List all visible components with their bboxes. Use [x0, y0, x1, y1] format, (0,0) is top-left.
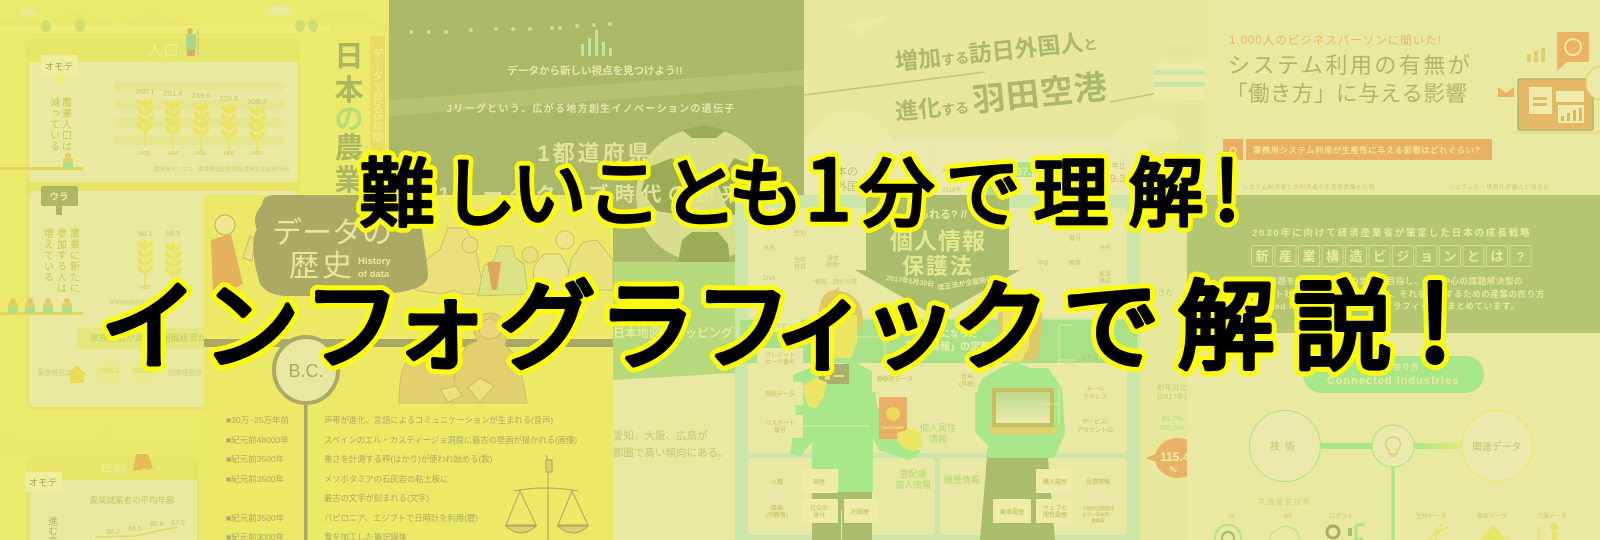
illustration: Caesar	[211, 215, 255, 298]
timeline years: ■紀元前3500年	[226, 454, 285, 464]
icon: house	[67, 365, 87, 383]
illustration: apes	[399, 313, 527, 403]
timeline years: ■紀元前48000年	[226, 435, 289, 445]
icon: IoT cloud	[1270, 526, 1299, 540]
illustration: cloud heading: of data	[358, 269, 390, 280]
title: vision: ョ	[1420, 249, 1433, 264]
title: Japan agriculture: 業	[334, 164, 364, 197]
small labels top: 特徴*	[826, 261, 841, 269]
icon: warning triangle	[1480, 525, 1506, 540]
stadium lights	[409, 22, 612, 34]
small labels top: 性別	[794, 229, 806, 237]
description: 一人一人の課題を解決する社会の実現を目指し、人間中心の課題解決型の	[1223, 276, 1523, 286]
bar chart: farming population: H25	[196, 151, 206, 157]
right column stats: (2017年)	[1157, 391, 1187, 401]
tiles upper: 静脈紋データ	[877, 375, 913, 383]
circle: related data	[1462, 410, 1532, 482]
source note: 農林業センサス、農業構造動態調査(農林水産省統計部)	[154, 165, 290, 173]
banner: personal information protection law	[855, 195, 1020, 317]
banner: personal information protection law: 2017年5月30日	[886, 273, 935, 289]
card: visitors bars: 2015年	[942, 166, 961, 174]
bar chart: farming population: H26	[224, 151, 234, 157]
icon: envelope	[1498, 87, 1514, 97]
description: 超スマート社会(Society 5.0 社会)と、それを推進するための産業の在り方	[1239, 289, 1545, 299]
illustration: cloud heading: History	[358, 256, 391, 267]
main title: line 2: インフォグラフィックで解説 !	[100, 240, 1452, 392]
line chart: age: 66.2	[106, 529, 120, 536]
timeline events	[324, 415, 577, 540]
hills header	[0, 10, 390, 35]
question tag: Q	[1229, 146, 1237, 157]
bar chart: farming population: 239.0	[192, 91, 210, 100]
question tag	[1223, 139, 1243, 160]
title: Japan agriculture	[334, 36, 385, 197]
title underline	[804, 72, 1158, 102]
source note 2: 新規就農者調査の調査結果	[110, 299, 170, 306]
small labels top: *家紋、顔だち等	[813, 278, 857, 286]
icon: control tower	[1154, 44, 1206, 160]
bar chart: farming population	[115, 82, 284, 157]
tiles upper: 音声	[961, 375, 973, 381]
bar chart: new farmers: 58.1	[138, 229, 152, 238]
title: vision: ?	[1517, 249, 1525, 264]
tiles lower: 身分	[813, 511, 825, 519]
right column stats: 前年対比	[1157, 382, 1187, 392]
heading: システム利用の有無が	[1228, 53, 1472, 78]
label: omote: オモテ	[29, 478, 57, 489]
main title: line 1: 難しいことも1分で理解!	[359, 124, 1240, 245]
bar chart: farming population: 251.4	[164, 89, 182, 98]
stat: 1344.3	[130, 360, 156, 386]
icon: AI gear	[1215, 525, 1241, 540]
tiles upper: アドレス	[1083, 394, 1107, 401]
card: visitors bars: 年比	[1112, 161, 1126, 170]
small labels top: 番号	[1069, 235, 1081, 242]
pill: connected industries: Connected Industries	[1327, 375, 1459, 387]
line chart: age: 66.8	[150, 521, 164, 528]
tiles lower: より一部抜粋、	[1082, 511, 1114, 518]
card: visitors bars: 2016年	[942, 186, 961, 194]
bar chart: new farmers	[137, 229, 181, 291]
tiles lower: 位置情報	[1086, 478, 1110, 486]
connectors	[1320, 443, 1464, 540]
title: vision: 産	[1279, 249, 1292, 264]
definition band: 明確になった	[923, 328, 977, 339]
small labels top: DNA	[763, 276, 775, 282]
timeline rail	[204, 339, 613, 347]
title: Japan agriculture: 農	[334, 132, 364, 165]
right column stats	[1142, 288, 1201, 478]
lower tiles card right	[940, 458, 1127, 535]
title: Haneda: 進化する羽田空港	[893, 68, 1110, 127]
pill: connected industries: 産業の在り方	[1367, 362, 1419, 372]
small labels top	[763, 229, 1111, 286]
illustration: cloud heading: 歴史	[289, 250, 355, 283]
panel: data history timeline	[204, 195, 613, 540]
tiles lower: ウェブの	[1043, 506, 1067, 512]
banner: family vs organisation	[77, 328, 207, 349]
panel: J-League soccer infographic	[389, 0, 805, 540]
tiles lower: (宗教等)	[766, 511, 788, 519]
tagline: Jリーグという、広がる地方創生イノベーションの遺伝子	[446, 102, 736, 115]
tiles lower: 人種	[771, 478, 783, 486]
icon: robot arm	[1327, 523, 1363, 539]
title: Japan agriculture: 日	[334, 41, 364, 73]
label: ura	[41, 186, 78, 215]
lower section: map	[613, 262, 735, 540]
icon: gear	[1586, 66, 1600, 100]
card: visitors bars: 本の	[836, 164, 858, 178]
panel: personal information protection law	[735, 195, 1140, 540]
card: visitors bars	[804, 140, 1147, 230]
heading: sensitive info: 個人情報	[895, 479, 931, 490]
kicker: 1,000人のビジネスパーソンに聞いた!	[1229, 34, 1442, 47]
timeline events: メソポタミアの石灰岩の粘土板に	[324, 474, 448, 484]
title: Japan agriculture: データで見る5年間	[371, 47, 384, 143]
small labels top: 年収	[1037, 259, 1049, 267]
tiles upper: (声紋)	[959, 380, 975, 388]
definition band	[740, 320, 1137, 363]
main title: line 2: インフォグラフィックで解説 !	[100, 240, 1452, 392]
tiles upper: クレジット	[765, 353, 795, 359]
heading: sensitive info: 要配慮	[899, 469, 927, 479]
leader lines	[802, 325, 1075, 426]
small labels top: 住所	[1099, 244, 1111, 252]
icon: chat magnifier	[1557, 32, 1589, 71]
heading line 2: 「働き方」に与える影響	[1226, 82, 1467, 106]
stadium band	[389, 70, 805, 116]
heading: attribute info: 個人属性	[920, 423, 956, 433]
icon: light bulb	[1372, 425, 1414, 467]
heading: club era: 1リーグクラブ時代の到来	[439, 182, 747, 206]
title: vision: ジ	[1396, 249, 1410, 264]
lower tiles card left	[748, 458, 935, 535]
bar chart: new farmers: H23	[140, 285, 150, 291]
banner: family vs organisation: 家族経営が減り、組織経営が	[90, 332, 207, 343]
bar chart: farming population: H27	[252, 151, 262, 157]
icon: soccer ball	[636, 125, 770, 262]
label: omote	[25, 472, 62, 492]
small labels top: 職業	[1069, 259, 1081, 267]
lower section: map: 日本地図にマッピング	[613, 325, 733, 340]
timeline events: 重さを計測する秤(はかり)が使われ始める(数)	[324, 454, 493, 464]
figure: woman	[975, 292, 1065, 540]
circle: related data: 関連データ	[1472, 441, 1522, 453]
tiles lower	[766, 469, 1114, 524]
title: vision: 業	[1302, 249, 1316, 264]
panel: system use survey	[1205, 0, 1600, 195]
timeline events: 最古の文字が刻まれる(文字)	[324, 493, 429, 503]
badge: B.C.	[274, 337, 338, 403]
card: population	[26, 28, 300, 410]
banner: personal information protection law: 守られる? //	[907, 207, 967, 221]
heading: one prefecture: 1都道府県	[537, 141, 653, 166]
tiles lower: 購入履歴	[1043, 478, 1067, 486]
text: organisation management: 組織経営体	[168, 368, 202, 377]
illustration: cloud heading	[253, 195, 428, 304]
tiles lower: 犯罪歴	[851, 508, 869, 516]
icon: passport	[879, 397, 907, 439]
question bar: 業務用システム利用が生産性に与える影響はどれぐらい?	[1253, 145, 1480, 155]
banner: personal information protection law: 個人情報	[890, 228, 986, 254]
bar chart: farming population: H23	[140, 151, 150, 157]
figure: man	[790, 286, 922, 540]
small labels top: 氏名	[763, 244, 775, 252]
icon: stump	[133, 454, 153, 470]
category labels: AI	[1228, 514, 1234, 520]
icon: farmer	[186, 28, 198, 56]
heading: attribute info: 情報	[929, 433, 947, 444]
icon: small bars	[1527, 48, 1545, 62]
description: Connected Industries をインフォグラフィックでまとめています。	[1237, 301, 1519, 311]
callout: 115.4%: 115.4	[1160, 450, 1190, 464]
icon: plane	[836, 15, 888, 35]
badge: B.C.: B.C.	[288, 361, 324, 381]
card: visitors bars: 日外国人	[825, 180, 869, 193]
timeline years	[226, 415, 290, 540]
right column stats: 101.5%	[1159, 423, 1185, 432]
tiles upper: 指紋データ	[765, 390, 795, 398]
icon: credit card	[819, 364, 849, 384]
card: visitors bars: 4.0	[1000, 185, 1015, 197]
line chart: age: 66.5	[128, 526, 142, 533]
title: vision: ン	[1443, 249, 1457, 264]
panel: Haneda airport infographic	[804, 0, 1206, 540]
chart title: 農業就業者の平均年齢	[89, 495, 175, 505]
text: increasing: 増えている	[42, 227, 54, 283]
timeline years: ■紀元前3500年	[226, 513, 285, 523]
tiles upper: アカウントID	[1077, 426, 1114, 434]
text: entrants: 参加する人は	[54, 228, 66, 294]
illustration: historic figures	[415, 228, 613, 296]
timeline events: 声帯が進化、言語によるコミュニケーションが生まれる(音声)	[324, 415, 553, 425]
illustration: cloud heading: データの	[272, 217, 392, 250]
panel: agriculture infographic	[0, 0, 390, 540]
bar chart: farming population: 209.7	[248, 97, 266, 106]
card: age	[25, 454, 199, 540]
tiles upper: カード番号	[765, 359, 795, 366]
category labels: ロボット	[1329, 512, 1353, 520]
tiles lower: 信条	[771, 506, 783, 512]
upper tiles card	[748, 363, 1127, 453]
section label: shared tech: 共通基盤技術	[1258, 497, 1312, 506]
bar chart: new farmers: 56.5	[166, 229, 180, 238]
icon: laptop	[988, 388, 1058, 434]
card: visitors bars: 737.	[1010, 166, 1031, 178]
text: decreasing: 減っている	[48, 96, 60, 152]
timeline years: ■紀元前3500年	[226, 474, 285, 484]
icon: data bars	[581, 30, 612, 56]
small labels top: 家族	[1099, 272, 1111, 278]
description	[1223, 276, 1545, 311]
heading: age: 年齢	[100, 462, 126, 477]
faint mountains	[0, 427, 199, 450]
subtitle: データから新しい視点を見つけよう!!	[508, 64, 682, 77]
tiles upper: メール	[1086, 387, 1104, 393]
small labels top: 生年	[794, 258, 806, 264]
tiles upper: サービス/	[1082, 420, 1108, 426]
definition band: 「個人情報」の定義	[900, 340, 990, 353]
icon: passport: PASSPORT	[882, 425, 904, 430]
title: vision: 新	[1255, 249, 1269, 264]
timeline years: ■30万~25万年前	[226, 415, 290, 425]
lower section: map: 都圏で高い傾向にある。	[613, 446, 728, 459]
small labels top: 身体	[827, 256, 839, 262]
tiles lower: 閲覧履歴	[1043, 511, 1067, 519]
text: new entrants increasing: 農業に新たに	[68, 227, 80, 294]
tiles upper	[757, 318, 1114, 439]
line chart: age: 67.0	[171, 520, 185, 527]
right column stats: ってきた	[1142, 288, 1173, 297]
title: Japan agriculture: の	[334, 104, 364, 136]
tiles lower: ※医師公開資料	[1082, 506, 1114, 511]
heading: population: 人口	[147, 43, 179, 60]
icon: dashboard monitor	[1513, 79, 1600, 134]
stat: 1344.3: 1344.3	[132, 368, 154, 375]
hand	[803, 378, 827, 408]
category labels: 生物データ	[1416, 512, 1446, 520]
banner: personal information protection law: 改正法が全面施行	[937, 274, 994, 292]
kicker: 2030年に向けて経済産業省が策定した日本の成長戦略	[1252, 227, 1532, 239]
title: vision: と	[1467, 249, 1480, 264]
circle: technology: 技術	[1270, 440, 1300, 453]
small labels top: 構成	[1099, 277, 1111, 285]
title: vision: は	[1490, 249, 1504, 264]
tiles upper: パスポート	[765, 421, 795, 427]
note left: システム利用者と非利用者の生産性意識を比較。	[1243, 183, 1381, 191]
timeline events: スペインのエル・カスティージョ洞窟に最古の壁画が描かれる(画像)	[324, 435, 577, 445]
label: omote: オモテ	[45, 62, 73, 73]
tiles upper: 誕生日	[1081, 354, 1099, 362]
stat: 1586.1: 1586.1	[98, 368, 120, 375]
icon: caregiver	[1539, 523, 1558, 540]
illustration: scales	[506, 455, 588, 540]
timeline events: バビロニア、エジプトで日時計を利用(暦)	[324, 513, 478, 523]
text: family management: 家族経営体	[38, 368, 72, 377]
label: ura: ウラ	[49, 192, 69, 203]
bar chart: farming population: 260.1	[136, 87, 154, 96]
tiles upper: マイナンバー	[769, 323, 805, 330]
shelf with farmers	[0, 153, 83, 315]
title: visitors: 増加する訪日外国人と	[894, 28, 1098, 75]
bar chart: farming population: H24	[168, 151, 178, 157]
heading: history info: 履歴情報	[944, 474, 980, 485]
stat: 1586.1	[96, 360, 122, 386]
category labels: 事故データ	[1477, 512, 1507, 520]
callout: 115.4%: %	[1169, 465, 1177, 474]
right column stats: 90.7%	[1161, 414, 1183, 423]
callout: 115.4%	[1145, 438, 1201, 478]
label: omote	[41, 55, 78, 84]
banner: personal information protection law: 保護法	[902, 254, 974, 279]
faint clouds	[804, 110, 1180, 140]
main title: line 1: 難しいことも1分で理解!	[359, 124, 1240, 245]
category labels: IoT	[1284, 514, 1293, 520]
bar chart: new farmers: H24	[168, 285, 178, 291]
pill: connected industries	[1303, 356, 1484, 393]
small labels top: 月日	[794, 264, 806, 271]
category labels: 介護データ	[1537, 512, 1567, 520]
icon: DNA	[1429, 524, 1448, 540]
tiles lower: 再編成	[1091, 517, 1105, 524]
card: visitors bars: 9.3	[1110, 173, 1125, 185]
icon: trees and clouds	[20, 5, 318, 32]
title boxes	[1252, 246, 1531, 266]
note right: システム化・情報化が進んだ場合の	[1449, 183, 1550, 191]
tiles lower: 乗車履歴	[1000, 508, 1024, 516]
panel: new industrial structure vision	[1187, 195, 1600, 540]
tiles lower: 社会的	[810, 506, 828, 512]
title: Japan agriculture: 本	[334, 74, 364, 107]
line chart: age	[95, 520, 185, 537]
bar chart: farming population: 226.6	[220, 94, 238, 103]
text: farming population falling: 農業人口は	[60, 96, 72, 152]
title: vision: 構	[1326, 249, 1339, 264]
tiles upper: 番号	[774, 427, 786, 434]
category labels	[1228, 512, 1567, 520]
lower section: map: 愛知、大阪、広島が	[613, 429, 708, 442]
title: vision: 造	[1349, 249, 1363, 264]
circle: technology	[1250, 410, 1320, 482]
tiles lower: 病歴	[813, 478, 825, 486]
question bar	[1246, 139, 1492, 160]
title: vision: ビ	[1373, 249, 1386, 264]
